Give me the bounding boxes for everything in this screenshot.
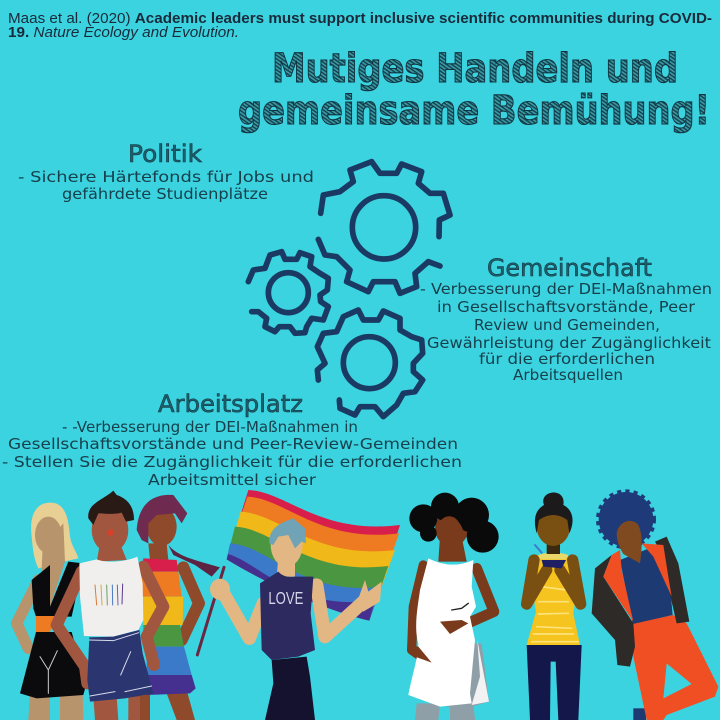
section: Gemeinschaft: Gewährleistung der Zugänglichkeit (427, 334, 711, 352)
person: flag bearer in LOVE top (210, 518, 382, 720)
section: Gemeinschaft: in Gesellschaftsvorstände, Peer (437, 298, 696, 316)
section: Arbeitsplatz: Gesellschaftsvorstände und Peer-Review-Gemeinden (8, 435, 458, 453)
section: Politik: Politik (128, 140, 202, 168)
section: Gemeinschaft: für die erforderlichen (479, 350, 655, 368)
person: person with blue afro and orange trousers (592, 492, 718, 720)
section: Arbeitsplatz: Arbeitsmittel sicher (148, 471, 317, 489)
title (238, 46, 710, 134)
section: Politik: - Sichere Härtefonds für Jobs und (18, 168, 314, 186)
person: woman in yellow top with phone (527, 492, 582, 720)
citation: 19. Nature Ecology and Evolution. (8, 25, 239, 41)
section: Arbeitsplatz: Arbeitsplatz (158, 390, 303, 418)
section: Politik (18, 140, 314, 203)
people: left group (17, 490, 400, 720)
person: man in white top and navy shorts (57, 491, 163, 720)
section: Politik: gefährdete Studienplätze (62, 185, 268, 203)
section: Gemeinschaft: Gemeinschaft (487, 254, 652, 282)
flag pole (197, 567, 224, 655)
icon: small gear (248, 252, 328, 333)
person: flag bearer in LOVE top: LOVE (268, 588, 303, 608)
section: Gemeinschaft: - Verbesserung der DEI-Maßnahmen (420, 280, 712, 298)
section: Arbeitsplatz (2, 390, 462, 489)
person: blonde woman in black dress (17, 503, 86, 720)
icon: large gear (318, 162, 450, 293)
section: Gemeinschaft: Arbeitsquellen (513, 366, 623, 384)
citation: Maas et al. (2020) Academic leaders must support inclusive scientific communities during COVID- (8, 11, 712, 27)
icon: lower gear (317, 310, 423, 417)
section: Gemeinschaft: Review und Gemeinden, (474, 316, 660, 334)
section: Arbeitsplatz: - Stellen Sie die Zugänglichkeit für die erforderlichen (2, 453, 462, 471)
rainbow flag (227, 490, 400, 621)
section: Gemeinschaft (420, 254, 712, 384)
icon: gears (248, 162, 450, 417)
person: pregnant woman in white dress (408, 493, 499, 720)
person: woman in rainbow dress (128, 495, 220, 720)
people: right group (408, 492, 718, 720)
citation (8, 11, 712, 41)
section: Arbeitsplatz: - -Verbesserung der DEI-Maßnahmen in (62, 418, 358, 436)
